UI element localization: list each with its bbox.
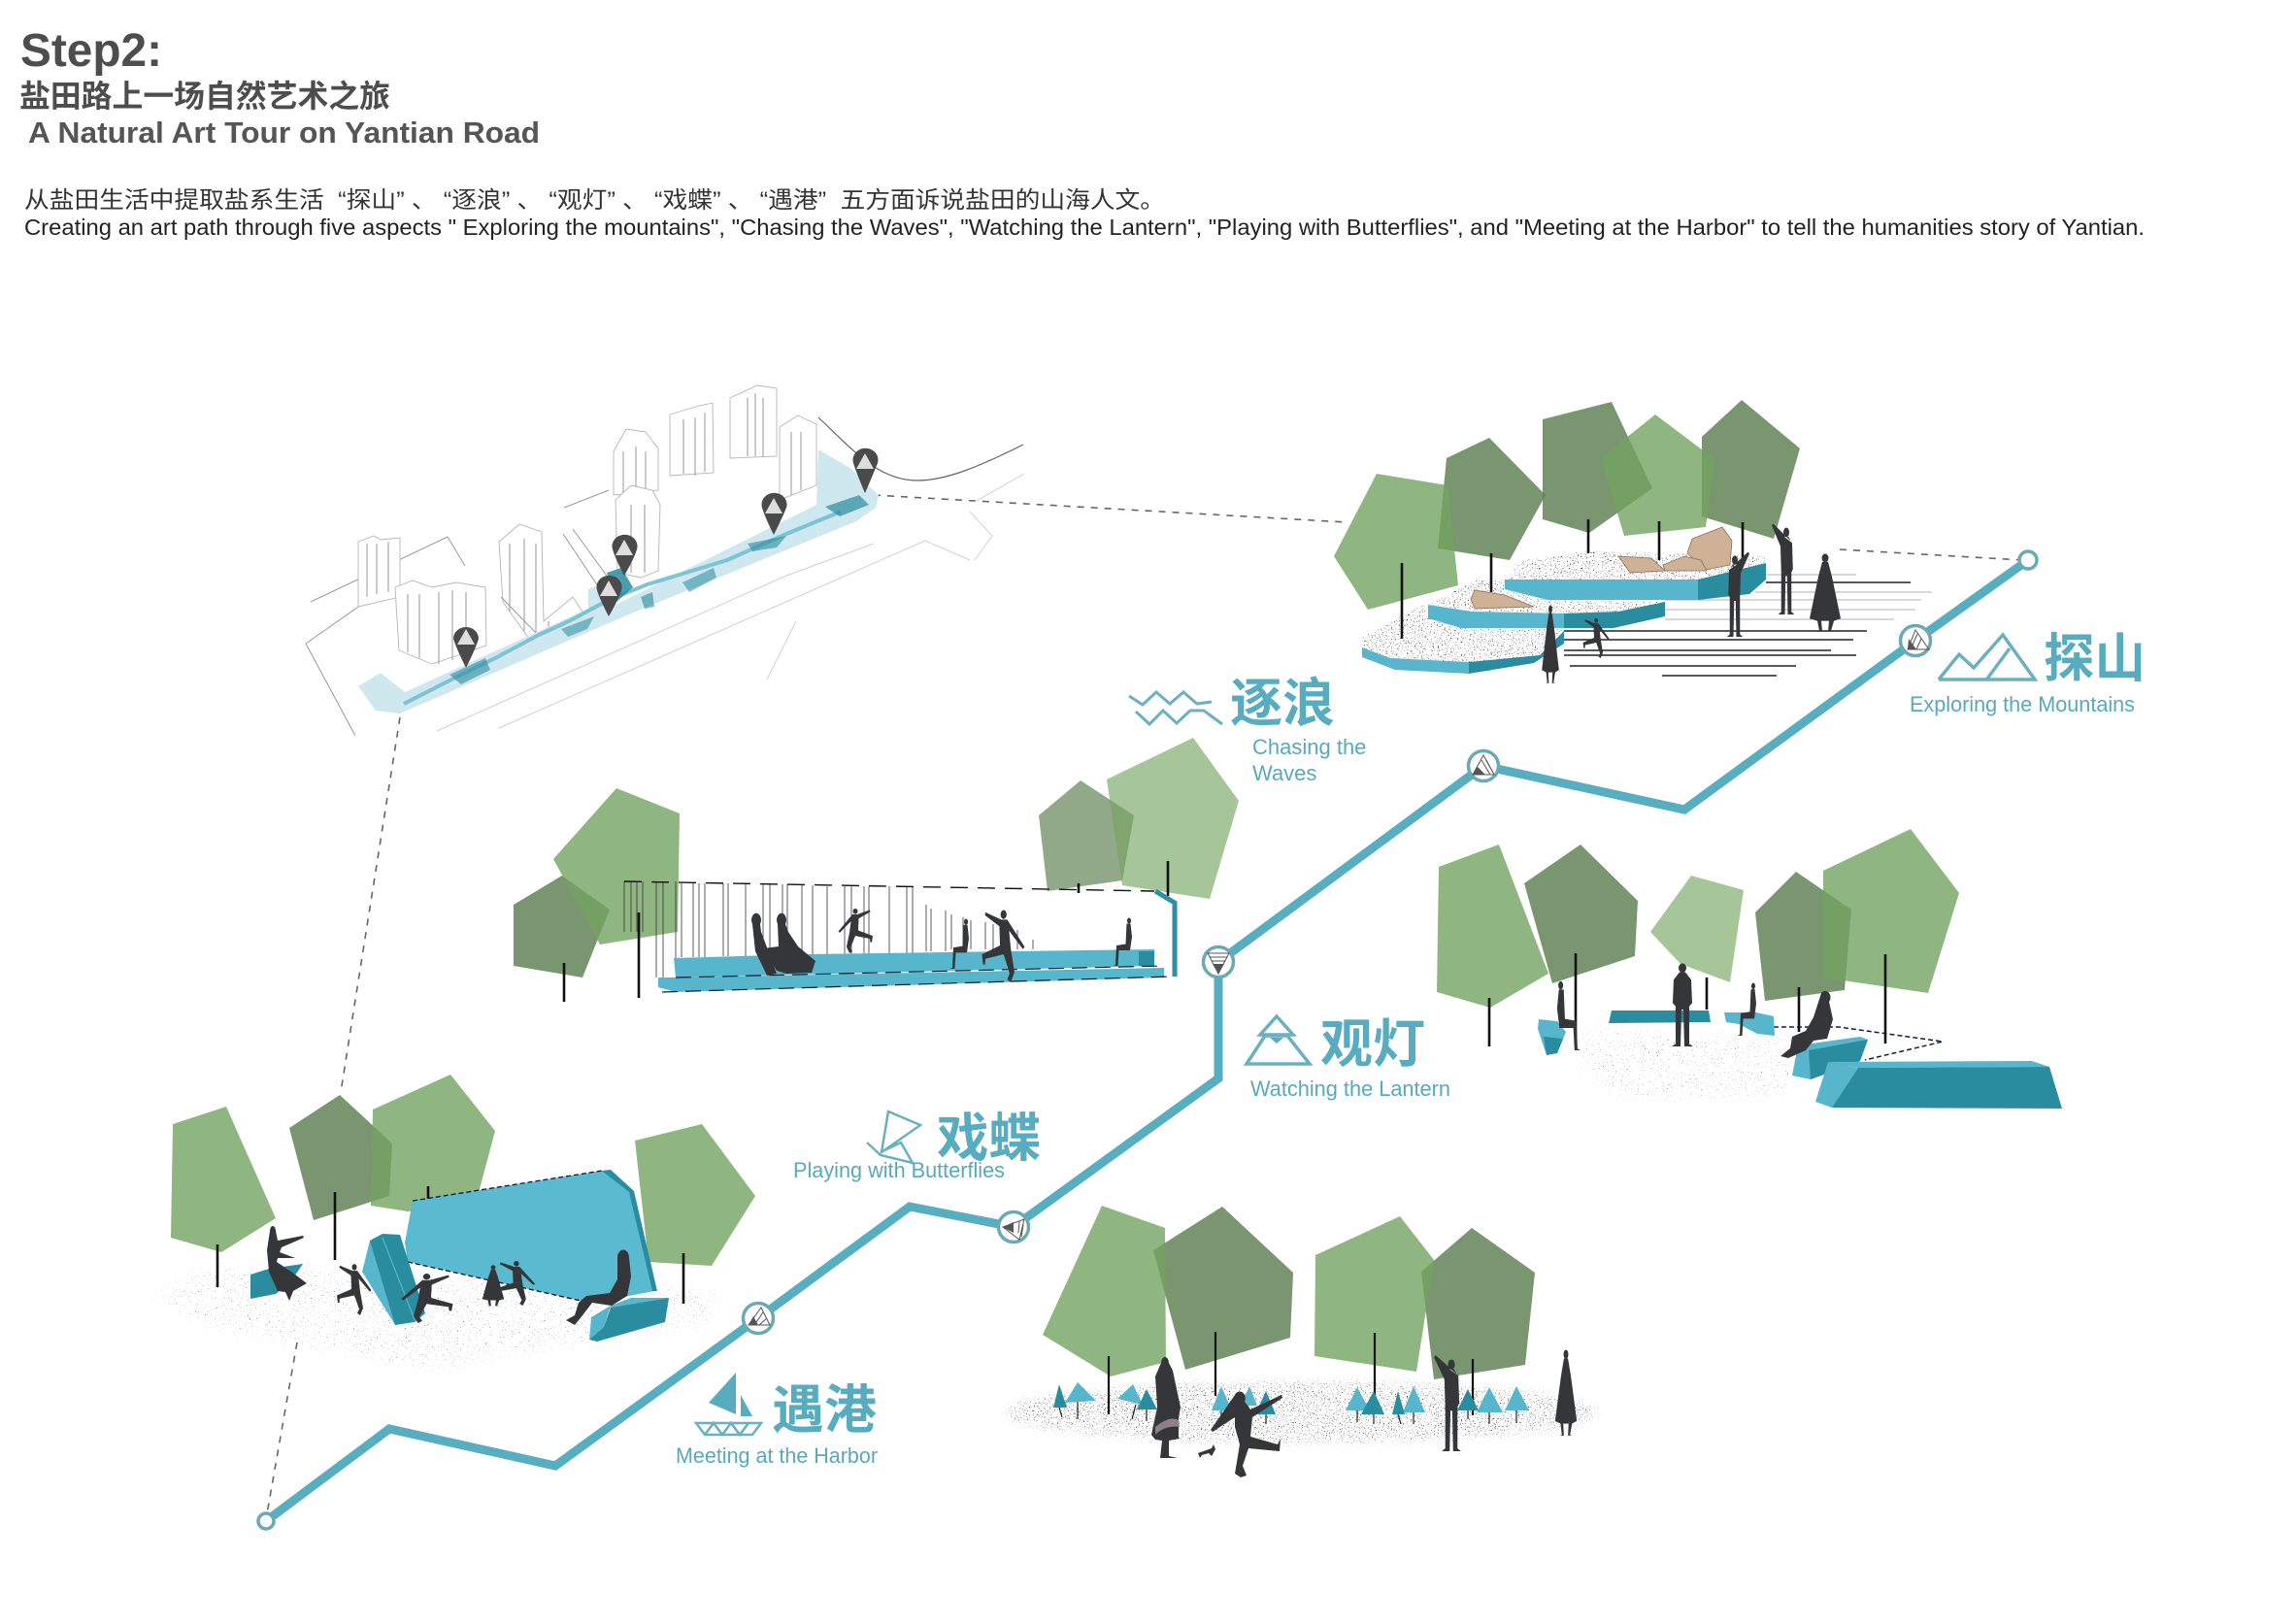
- map pin 1: [453, 627, 479, 668]
- seating: [658, 891, 1175, 992]
- trees: [1334, 400, 1800, 610]
- dashed leader lines: [266, 495, 2022, 1519]
- label: Playing with Butterflies: [793, 1110, 1041, 1182]
- label: Chasing the Waves: 逐浪: [1230, 675, 1335, 733]
- people: [751, 909, 1132, 982]
- route start marker: [258, 1513, 274, 1529]
- map pin 5: [852, 448, 878, 493]
- icon: sailboat: [696, 1373, 761, 1435]
- benches: [1538, 1011, 2062, 1109]
- label: Chasing the Waves: Waves: [1252, 761, 1316, 785]
- site plan: buildings: [358, 385, 816, 664]
- label: Chasing the Waves: Chasing the: [1252, 735, 1366, 759]
- right seat: [589, 1298, 669, 1342]
- route path line: [266, 560, 2028, 1521]
- icon: butterfly: [867, 1111, 920, 1163]
- label: Meeting at the Harbor: Meeting at the Harbor: [676, 1443, 878, 1468]
- site plan: road and block lines: [306, 417, 1024, 736]
- subtitle: Chinese: 盐田路上一场自然艺术之旅: [19, 79, 390, 114]
- trees: [1043, 1206, 1535, 1379]
- trees: [514, 738, 1239, 978]
- scene: exploring the mountains: [1334, 400, 1932, 683]
- trees: [171, 1075, 755, 1266]
- steps lines: [1564, 575, 1932, 676]
- intro text: English: Creating an art path through five aspects " Exploring the mountains", "Chasing the Waves", "Watching the Lantern", "Playing with Butterflies", and "Meeting at the Harbor" to tell the humanities story of Yantian.: [24, 215, 2145, 240]
- route node: lantern: [1204, 947, 1233, 977]
- hanging rods: [624, 881, 1033, 978]
- label: Chasing the Waves: [1129, 675, 1366, 785]
- gravel ground: [150, 1267, 723, 1371]
- route end marker: [2019, 551, 2037, 569]
- site plan: green corridor: [358, 449, 879, 713]
- small triangle trees: [1053, 1382, 1529, 1424]
- intro text: Chinese: 从盐田生活中提取盐系生活 “探山” 、 “逐浪” 、 “观灯” 、 “戏蝶” 、 “遇港” 五方面诉说盐田的山海人文。: [24, 187, 1165, 214]
- route node: waves: [1468, 751, 1499, 780]
- label: Meeting at the Harbor: [676, 1373, 878, 1468]
- gravel ground: [1582, 1029, 1806, 1099]
- gravel ground: [1005, 1382, 1597, 1442]
- people: [267, 1226, 631, 1325]
- platform: gravel tops: [1362, 551, 1766, 662]
- scene: meeting at the harbor: [1005, 1206, 1597, 1477]
- trunks: [217, 1186, 683, 1304]
- site plan axonometric: [306, 385, 1024, 736]
- dashed frame: [1774, 1027, 1943, 1060]
- people: [1151, 1349, 1577, 1477]
- people: [1542, 523, 1841, 683]
- subtitle: English: A Natural Art Tour on Yantian Road: [28, 116, 540, 149]
- map pin 3: [612, 535, 637, 576]
- scene: chasing the waves: [514, 738, 1239, 1002]
- label: Exploring the Mountains: [1910, 630, 2146, 716]
- tree trunks: [1402, 519, 1743, 639]
- route node: harbor: [744, 1303, 773, 1334]
- people: [1557, 963, 1833, 1058]
- icon: mountains: [1939, 635, 2035, 679]
- stool: [250, 1264, 303, 1299]
- map pin 4: [761, 493, 786, 535]
- trunks: [564, 861, 1168, 1002]
- label: Watching the Lantern: Watching the Lantern: [1250, 1077, 1450, 1101]
- A-frame seat: [362, 1234, 425, 1325]
- title: Step2: Step2:: [20, 25, 162, 77]
- label: Watching the Lantern: 观灯: [1320, 1015, 1425, 1074]
- icon: waves: [1129, 692, 1222, 724]
- label: Exploring the Mountains: 探山: [2044, 630, 2146, 688]
- wall: [405, 1170, 657, 1303]
- scene: watching the lantern: [1437, 829, 2062, 1109]
- route node: butterflies: [998, 1211, 1029, 1243]
- label: Watching the Lantern: [1247, 1015, 1450, 1101]
- map pin 2: [596, 576, 621, 616]
- trunks: [1489, 953, 1885, 1046]
- trees: [1437, 829, 1959, 1008]
- rod top dashed: [624, 881, 1154, 891]
- icon: lantern triangles: [1247, 1016, 1310, 1064]
- platform: teal sides: [1362, 563, 1766, 674]
- scene: playing with butterflies: [150, 1075, 755, 1371]
- label: Playing with Butterflies: 戏蝶: [937, 1110, 1041, 1168]
- rocks: [1471, 527, 1732, 609]
- trunks: [1109, 1332, 1473, 1415]
- label: Playing with Butterflies: Playing with Butterflies: [793, 1158, 1005, 1182]
- label: Meeting at the Harbor: 遇港: [772, 1381, 877, 1440]
- route node: mountains: [1901, 625, 1930, 656]
- label: Exploring the Mountains: Exploring the Mountains: [1910, 692, 2135, 716]
